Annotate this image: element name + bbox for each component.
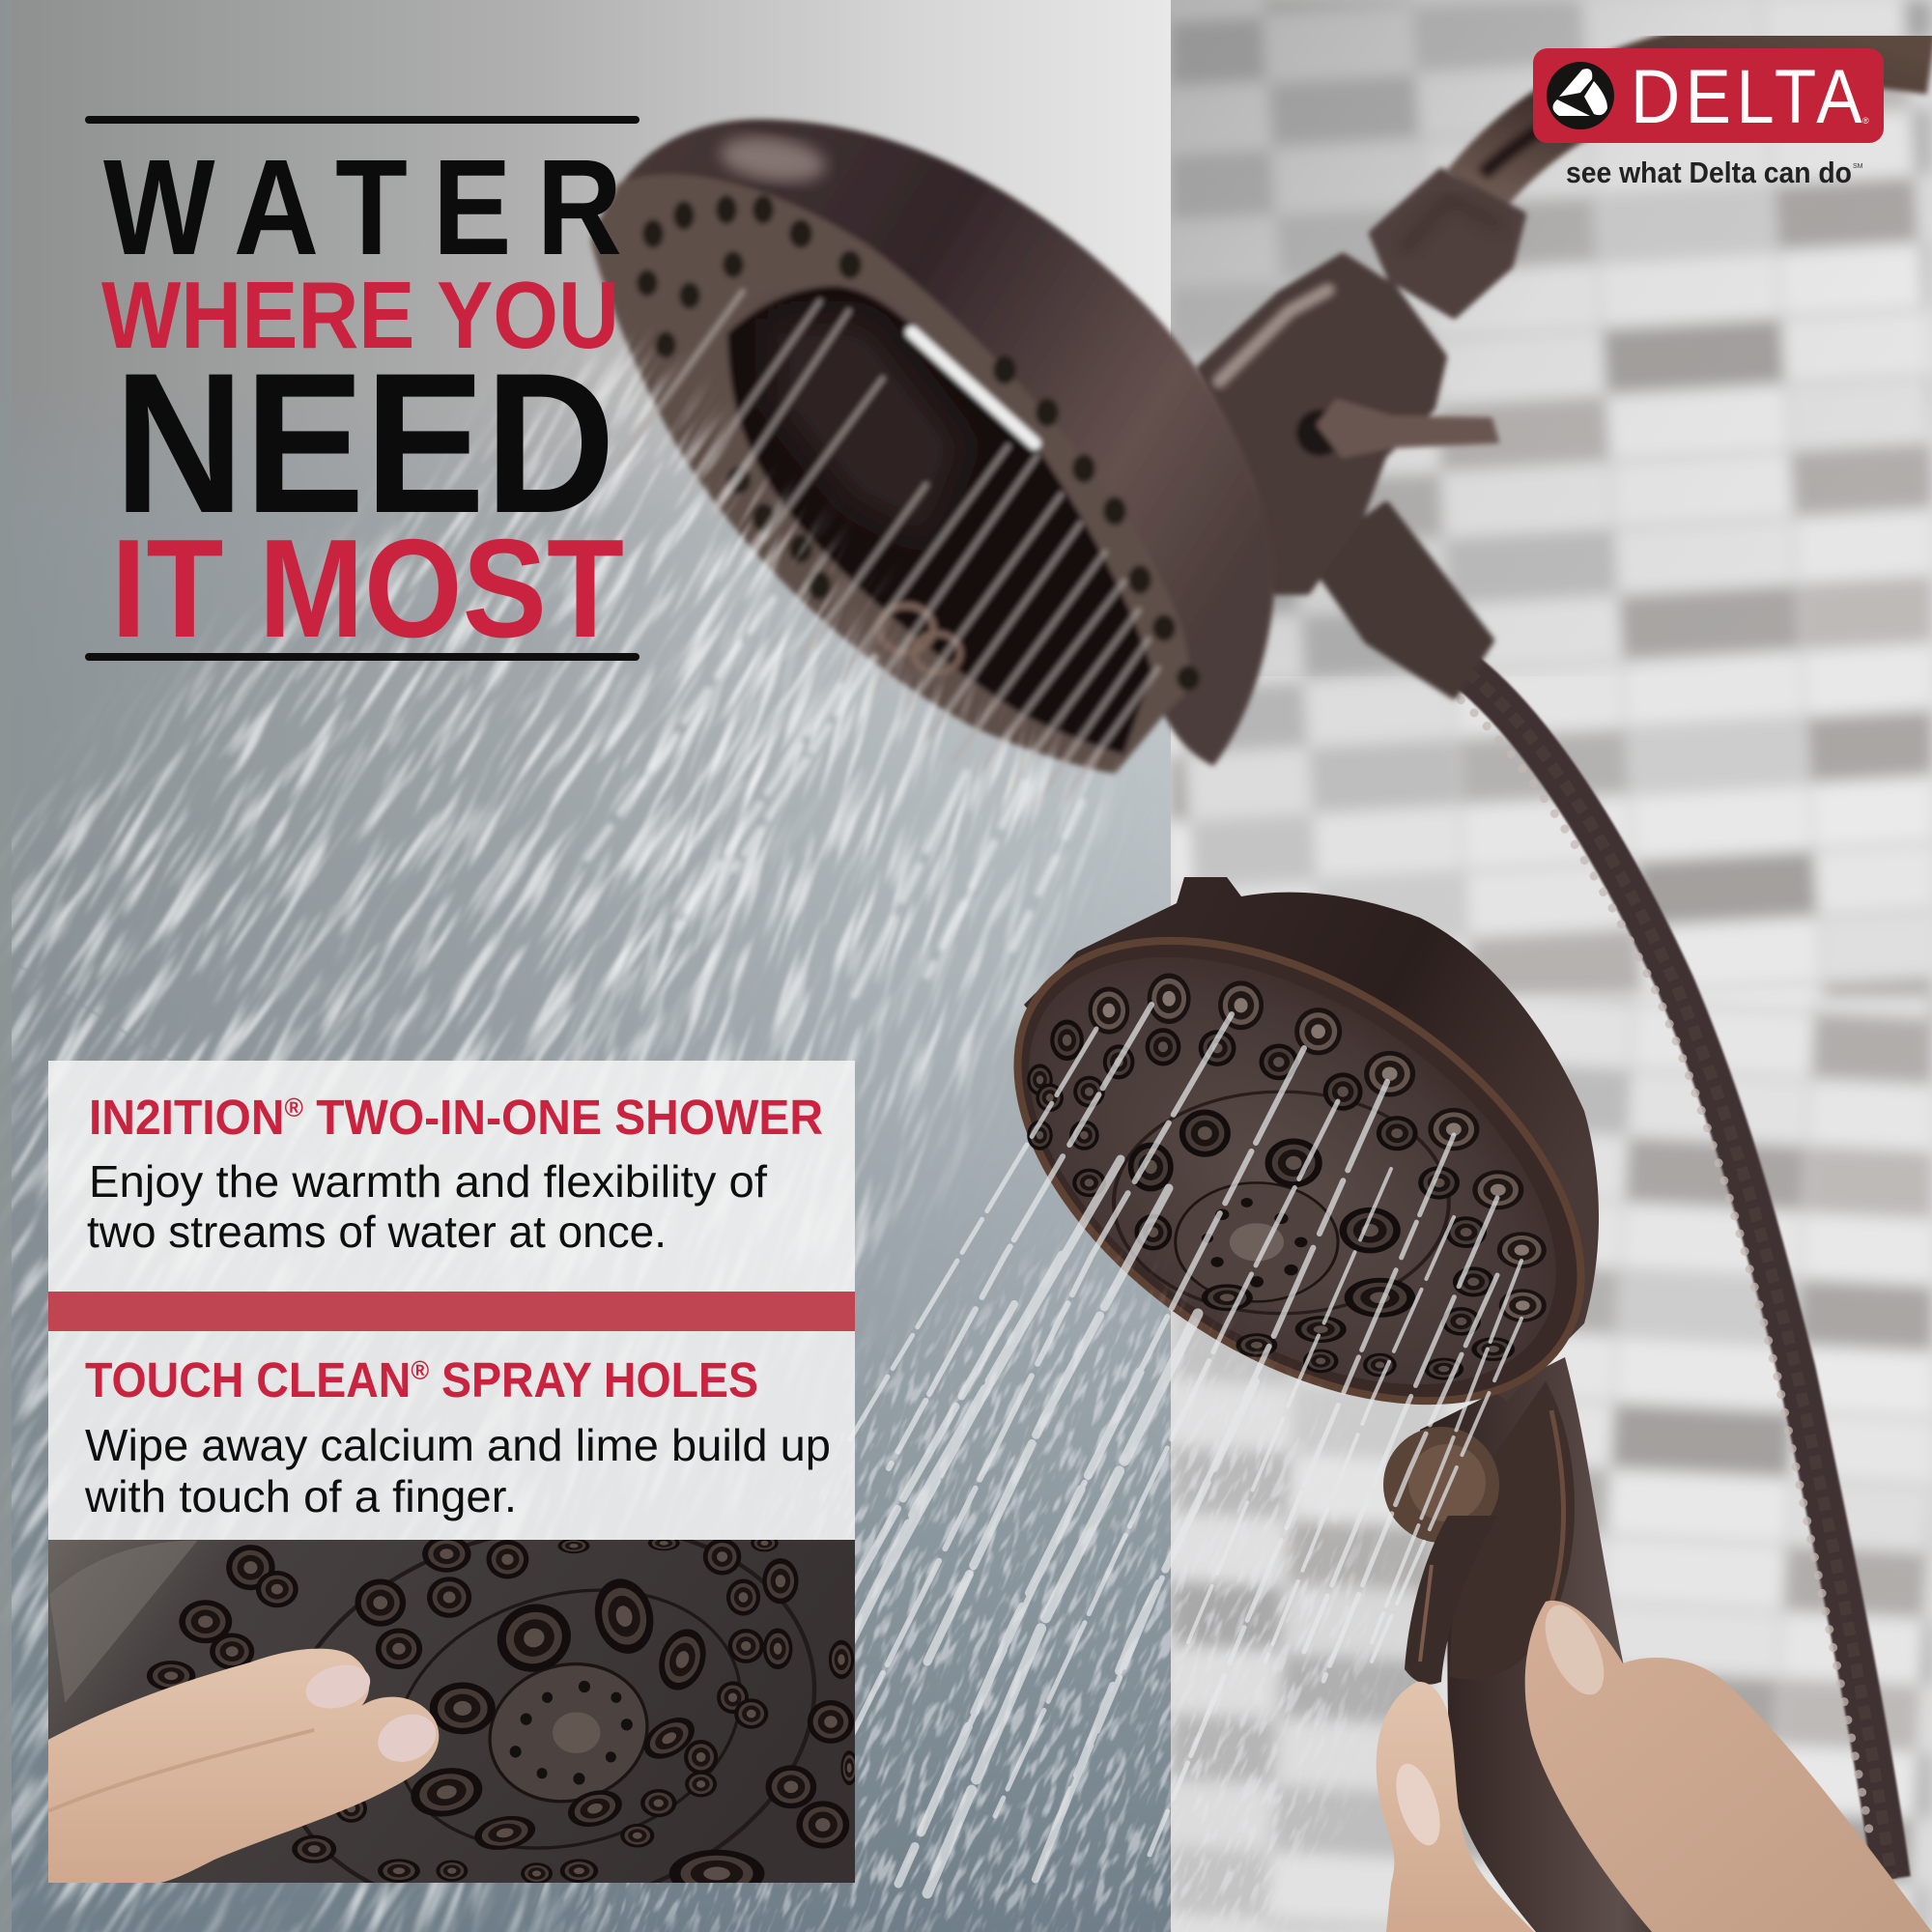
title line: WATER: WATER (103, 130, 647, 283)
body text: Wipe away calcium and lime build up (85, 1420, 831, 1470)
red divider band (48, 1292, 855, 1331)
background: shower wall (0, 0, 1174, 1932)
title block (85, 116, 647, 667)
title line: WHERE YOU: WHERE YOU (101, 262, 619, 368)
title line: IT MOST: IT MOST (111, 510, 624, 667)
overhead arm (1473, 50, 1932, 193)
fingers (48, 1649, 442, 1883)
heading: IN2ITION (89, 1090, 297, 1145)
logo: Delta (1533, 48, 1884, 143)
overhead shower head (591, 120, 1275, 807)
heading: ® (411, 1355, 429, 1385)
registered mark: ® (1862, 116, 1869, 126)
body text line 2: with touch of a finger. (84, 1471, 517, 1521)
background: tiled wall (1171, 0, 1932, 1932)
logo mark (1547, 62, 1614, 129)
left edge strip (0, 0, 12, 1932)
body text line 2: two streams of water at once. (87, 1207, 667, 1257)
flexible hose (1447, 671, 1891, 1879)
panel: Touch Clean (48, 1331, 855, 1540)
hand shower head (936, 846, 1662, 1495)
logo wordmark: DELTA (1631, 53, 1867, 139)
heading: ® (284, 1093, 303, 1122)
heading: SPRAY HOLES (429, 1352, 758, 1407)
hand shower handle (1383, 1357, 1686, 1932)
hand holding the shower (1377, 1597, 1932, 1932)
water spray from overhead head (12, 339, 1107, 1932)
logo badge (1533, 48, 1884, 143)
water streams from hand shower (553, 1002, 1524, 1932)
overhead shower mount (1202, 173, 1521, 696)
title line: NEED: NEED (114, 331, 615, 554)
tagline: SM (1853, 163, 1863, 170)
feature panel (48, 1061, 858, 1932)
heading: TWO-IN-ONE SHOWER (303, 1090, 823, 1145)
tagline: see what Delta can do (1566, 156, 1852, 189)
heading: TOUCH CLEAN (85, 1352, 442, 1407)
panel: In2ition (48, 1061, 855, 1292)
body text: Enjoy the warmth and flexibility of (89, 1156, 767, 1207)
photo: finger wiping spray holes (48, 1540, 855, 1883)
